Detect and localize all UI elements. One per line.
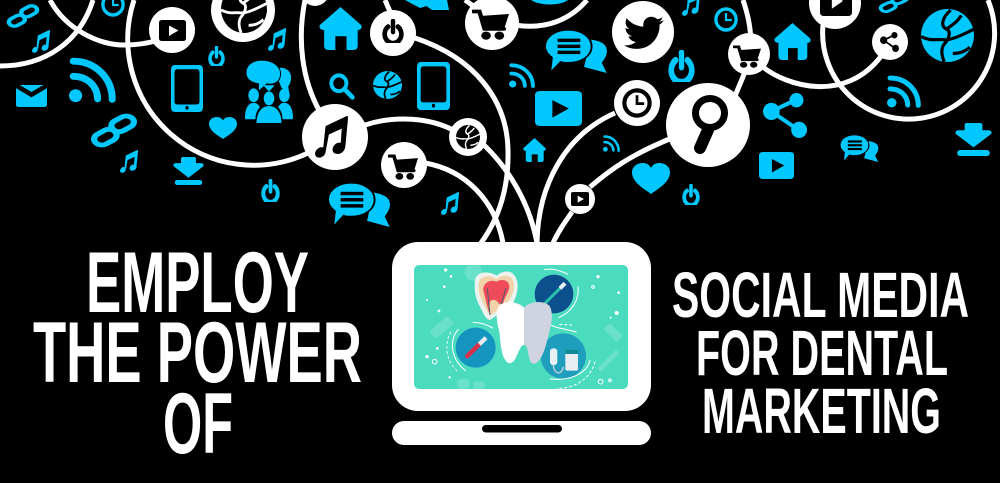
laptop base xyxy=(392,421,651,445)
icon: heart xyxy=(209,117,237,139)
icon: power xyxy=(263,181,278,202)
node: magnifier xyxy=(666,83,750,167)
icon: phone xyxy=(171,65,203,112)
node: cart right xyxy=(728,33,770,75)
line: OF: OF xyxy=(163,376,233,472)
large white tooth xyxy=(497,302,552,364)
icon: share xyxy=(763,93,807,138)
node: play xyxy=(149,7,195,53)
icon: link xyxy=(7,4,39,28)
icon: clock xyxy=(103,0,123,15)
icon: link large xyxy=(91,114,137,147)
line: EMPLOY: EMPLOY xyxy=(86,235,309,331)
icon: chat bubbles centre xyxy=(545,30,607,73)
icon: home right xyxy=(774,23,811,60)
icon: home xyxy=(319,7,362,50)
icon: power lower right xyxy=(684,186,698,205)
circle: electric toothbrush xyxy=(535,269,578,318)
node: play small xyxy=(565,184,595,214)
circle: red toothbrush xyxy=(447,322,496,371)
sparkle dots xyxy=(425,268,620,384)
node: globe small xyxy=(449,118,487,156)
network lines xyxy=(0,0,995,247)
icon: partial top shapes xyxy=(405,0,568,10)
icon: phone centre xyxy=(417,62,450,110)
node: music xyxy=(302,104,368,170)
node: share xyxy=(872,24,908,60)
icon: power right xyxy=(671,53,692,82)
icon: music note upper xyxy=(268,28,286,51)
icon: link top right xyxy=(879,0,909,13)
icon: download right xyxy=(955,123,992,156)
line: THE POWER: THE POWER xyxy=(33,305,362,401)
icon: chat bubbles left xyxy=(328,183,390,227)
icon: rss right xyxy=(887,78,918,107)
icon: music note small xyxy=(120,150,138,173)
icon: play right xyxy=(759,152,794,179)
node: power xyxy=(370,10,416,56)
icon: people with speech bubbles xyxy=(245,60,293,123)
node: top partial xyxy=(301,0,329,6)
icon: music note top right xyxy=(682,0,700,16)
icon: music note xyxy=(32,30,50,53)
icon: music note centre xyxy=(441,192,459,215)
white network nodes xyxy=(149,0,908,214)
icons: cyan social media icons xyxy=(7,0,992,227)
root canal tooth xyxy=(475,271,518,320)
node: clock xyxy=(614,80,660,126)
icon: rss centre xyxy=(509,65,533,88)
laptop body xyxy=(392,242,651,411)
node: cart xyxy=(381,142,427,188)
node: globe top xyxy=(211,0,275,42)
title right: Social Media for Dental Marketing xyxy=(672,259,969,447)
laptop screen xyxy=(414,265,628,389)
node: cart top xyxy=(465,0,519,50)
node: play top right xyxy=(809,0,861,29)
icon: globe right xyxy=(921,9,974,62)
icon: power small xyxy=(210,48,223,66)
laptop xyxy=(392,242,651,445)
icon: rss small xyxy=(603,137,619,152)
icon: rss feed xyxy=(69,61,112,102)
icon: globe xyxy=(373,71,402,99)
icon: chat bubbles right xyxy=(840,135,878,162)
icon: video play xyxy=(535,91,582,126)
icon: mail xyxy=(16,85,47,107)
icon: download xyxy=(173,157,204,185)
node: twitter xyxy=(612,1,674,63)
icon: search xyxy=(331,75,352,97)
circle: water flosser and jar xyxy=(541,324,595,388)
faint background items xyxy=(430,264,623,389)
title left: Employ the Power of xyxy=(33,235,362,472)
icon: clock right xyxy=(716,9,736,30)
icon: home small xyxy=(523,138,546,162)
dental illustration on screen xyxy=(425,264,623,389)
icon: heart right xyxy=(632,163,670,194)
